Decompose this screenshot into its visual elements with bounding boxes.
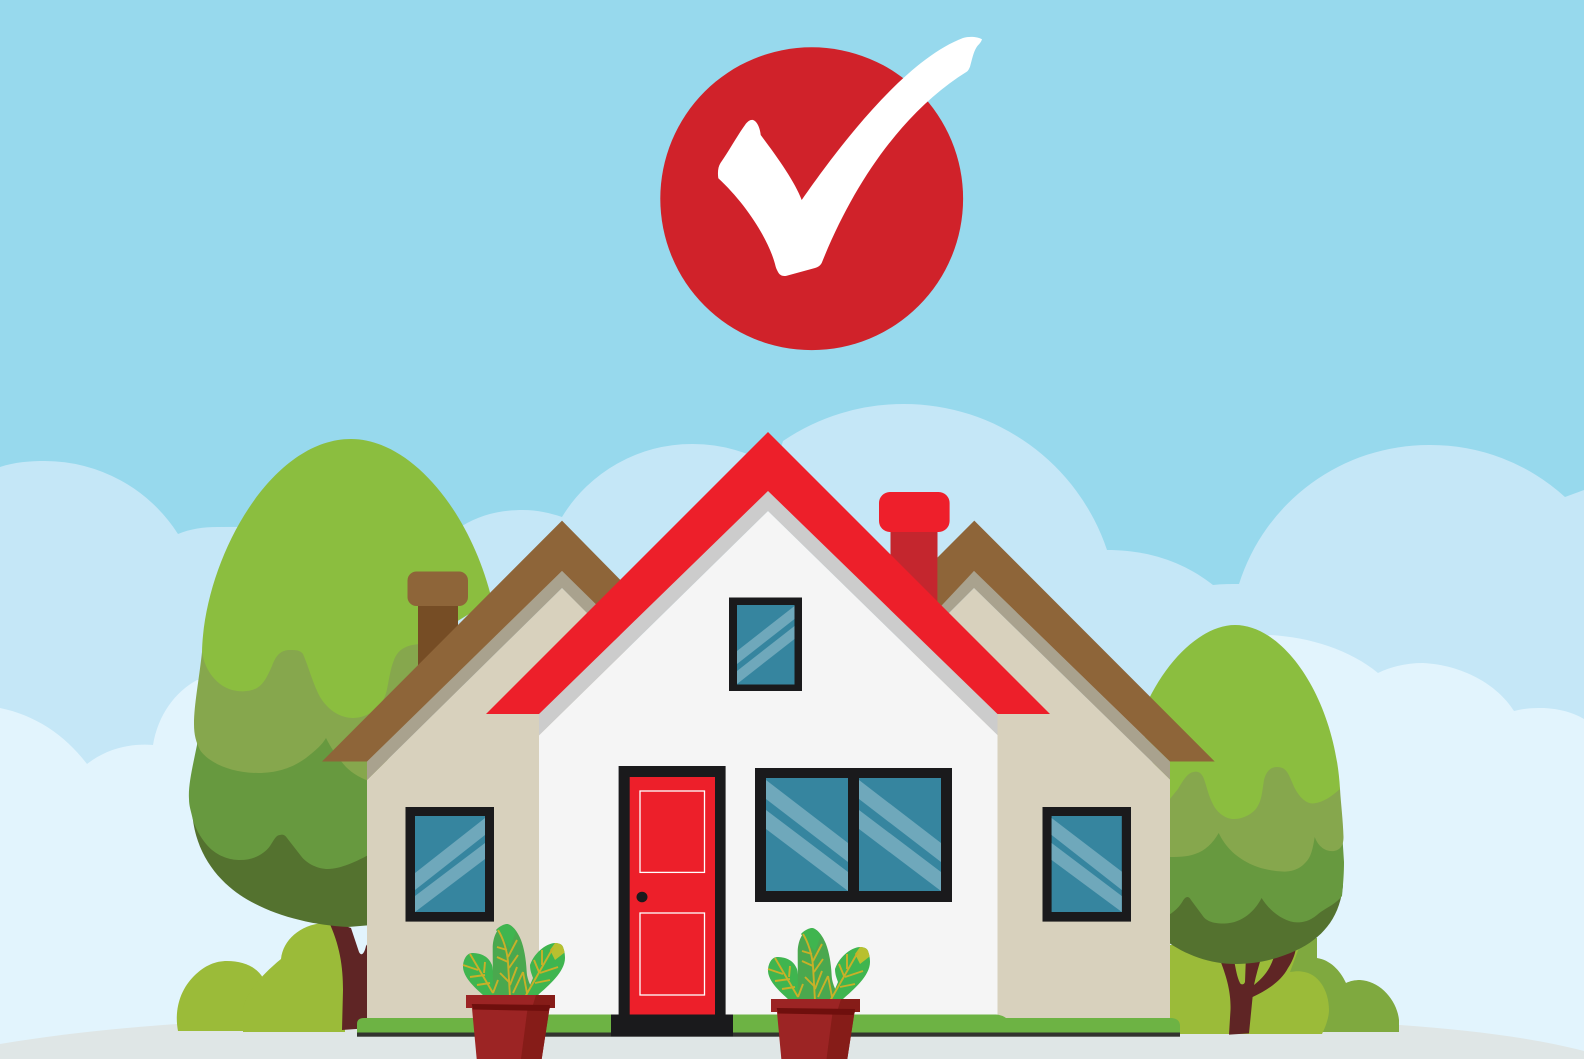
pot rim shadow xyxy=(777,1008,855,1015)
plant leaves xyxy=(463,924,565,997)
pot body xyxy=(777,1009,855,1059)
left chimney xyxy=(408,572,468,680)
small left bush xyxy=(177,961,270,1031)
right wing xyxy=(900,521,1215,1018)
right wing roof shadow xyxy=(930,571,1170,780)
right wing roof xyxy=(937,521,1215,762)
gable shadow xyxy=(539,491,998,735)
left tree dark canopy xyxy=(192,800,372,927)
front clouds xyxy=(0,635,1584,1059)
left tree olive canopy xyxy=(194,640,430,782)
left bushes xyxy=(177,923,345,1032)
pot rim shade xyxy=(532,995,555,1008)
large double window xyxy=(755,768,952,902)
plant veins xyxy=(463,930,558,997)
back clouds xyxy=(0,404,1584,800)
right window xyxy=(1042,807,1131,922)
main house xyxy=(486,432,1050,1018)
large left bush xyxy=(243,923,345,1032)
right chimney cap xyxy=(879,492,950,532)
base strips xyxy=(357,1014,1180,1037)
check mark logo xyxy=(660,37,982,350)
right chimney stem xyxy=(890,525,938,610)
pot body xyxy=(472,1005,550,1059)
pot body shade xyxy=(521,1005,550,1059)
pot body shade xyxy=(826,1009,855,1059)
left potted plant xyxy=(463,924,565,1059)
left tree trunk xyxy=(328,920,370,1030)
plant pot xyxy=(466,995,555,1059)
plant veins xyxy=(768,934,863,1001)
right tree trunk xyxy=(1220,948,1296,1035)
left wing wall xyxy=(367,588,640,1018)
plant leaves xyxy=(768,928,870,1001)
white check mark xyxy=(718,37,982,276)
left tree light canopy xyxy=(202,439,492,718)
right tree mid canopy xyxy=(1165,800,1344,924)
right tree xyxy=(1140,625,1344,1035)
door lower panel xyxy=(640,913,704,995)
door frame xyxy=(619,766,726,1016)
right chimney xyxy=(879,492,950,610)
right base strip xyxy=(1000,1018,1180,1032)
red roof xyxy=(486,432,1050,714)
right tree dark canopy xyxy=(1165,880,1343,964)
left wing xyxy=(322,521,640,1018)
left chimney stem xyxy=(418,600,458,680)
door knob xyxy=(636,892,648,902)
left chimney cap xyxy=(408,572,468,606)
right bushes xyxy=(1165,930,1399,1034)
right bush light xyxy=(1165,945,1329,1034)
right bush dark xyxy=(1280,930,1399,1032)
door xyxy=(611,766,733,1036)
right tree light canopy xyxy=(1140,625,1340,819)
door step xyxy=(611,1014,733,1036)
door leaf xyxy=(630,777,715,1014)
door upper panel xyxy=(640,791,704,872)
right potted plant xyxy=(768,928,870,1059)
plant pot xyxy=(771,999,860,1059)
left base strip xyxy=(357,1018,600,1032)
left window xyxy=(406,807,494,922)
attic window xyxy=(729,598,802,691)
left tree xyxy=(189,439,492,1030)
left tree mid canopy xyxy=(189,700,372,869)
right wing wall xyxy=(900,588,1170,1018)
pot rim xyxy=(466,995,555,1008)
pot rim xyxy=(771,999,860,1012)
ground xyxy=(0,1024,1584,1059)
left wing roof shadow xyxy=(367,571,620,780)
centre base strip xyxy=(540,1014,1006,1032)
logo red circle xyxy=(660,47,963,350)
pot rim shade xyxy=(837,999,860,1012)
right tree olive canopy xyxy=(1165,750,1344,872)
left wing roof xyxy=(322,521,640,762)
main wall xyxy=(539,511,998,1018)
pot rim shadow xyxy=(472,1004,550,1011)
base shadow line xyxy=(357,1032,1180,1037)
